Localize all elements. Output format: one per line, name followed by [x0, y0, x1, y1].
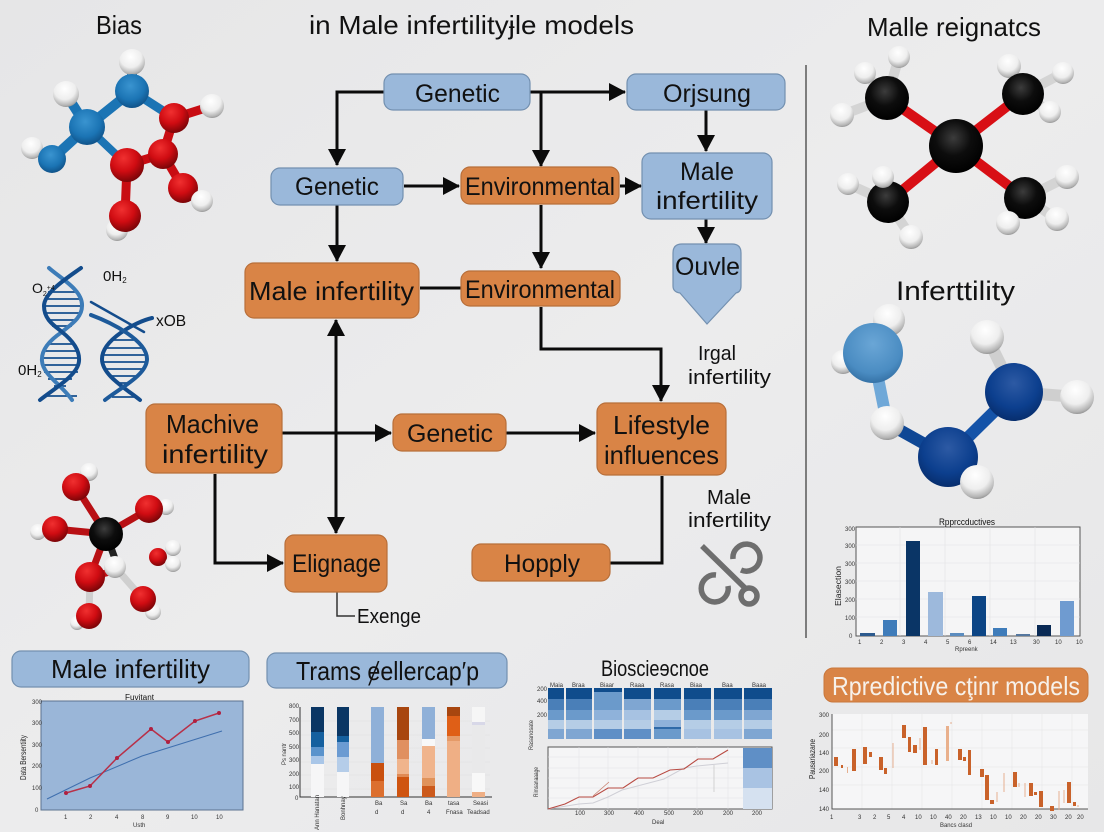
icon: scissors-like link — [701, 544, 760, 604]
chart: Reproductives bar chart: Elasection — [834, 566, 843, 606]
chart: line chart: 2 — [89, 815, 93, 821]
chart: candlestick: 4 — [902, 815, 906, 821]
icon: molecule bottom left — [30, 463, 181, 630]
chart: bioscience line chart: 200 — [723, 811, 734, 817]
node: Genetic left: Genetic — [295, 173, 379, 201]
chart: candlestick: 300 — [819, 713, 830, 719]
chart: stacked bars: Ba — [375, 801, 383, 807]
chart: Reproductives bar chart — [834, 517, 1083, 653]
chart: bioscience line chart — [534, 747, 772, 826]
node: Elignage: Elignage — [292, 550, 381, 578]
node: Ouvle callout — [673, 244, 741, 324]
chart: stacked bars: 800 — [289, 704, 300, 710]
node: Orjsung — [627, 74, 785, 110]
node: Lifestyle influences: influences — [604, 440, 719, 470]
banner: Male infertility: Male infertility — [51, 654, 210, 684]
banner: Male infertility — [12, 651, 249, 687]
chart: stacked bars: d — [375, 810, 378, 816]
chart: stacked bars: d — [401, 810, 404, 816]
node: Orjsung: Orjsung — [663, 80, 751, 108]
chart: Reproductives bar chart: 3 — [902, 640, 906, 646]
divider — [805, 65, 807, 638]
chart: Reproductives bar chart: 100 — [845, 616, 856, 622]
chart: candlestick: 10 — [915, 815, 922, 821]
chart: heatmap: Baa — [722, 683, 733, 689]
chart: heatmap: Maia — [550, 683, 564, 689]
label: Irgal infertility — [688, 343, 771, 389]
chart: stacked bars: Teadsad — [467, 810, 490, 816]
label: Irgal infertility: Irgal — [698, 343, 736, 365]
node: Environmental lower: Environmental — [465, 276, 615, 304]
label: Irgal infertility: infertility — [688, 367, 771, 389]
node: Genetic top — [384, 74, 530, 110]
label: O2: 2 — [43, 291, 47, 298]
chart: stacked bars: Ann Hanatan — [315, 795, 321, 830]
chart: line chart: 100 — [32, 786, 43, 792]
chart: candlestick: 140 — [819, 788, 830, 794]
chart: bioscience line chart: 300 — [604, 811, 615, 817]
chart: stacked bars: Fnasa — [446, 810, 463, 816]
chart: heatmap: Biaa — [690, 683, 703, 689]
chart: stacked bars: Seasi — [473, 801, 488, 807]
chart: Reproductives bar chart: 300 — [845, 562, 856, 568]
icon: molecule lower right — [831, 304, 1094, 499]
chart: bioscience line chart: 100 — [575, 811, 586, 817]
chart: heatmap: Raaa — [630, 683, 645, 689]
node: Machive infertility: infertility — [162, 439, 268, 469]
chart: candlestick: 20 — [960, 815, 967, 821]
chart: stacked bars: Sa — [400, 801, 408, 807]
label: O2: O — [32, 280, 43, 296]
chart: line chart: 10 — [216, 815, 223, 821]
flowchart connectors — [215, 92, 706, 616]
chart: line chart: 9 — [166, 815, 170, 821]
chart: line chart: Usth — [133, 823, 145, 829]
chart: Reproductives bar chart: 300 — [845, 527, 856, 533]
chart: candlestick: 13 — [975, 815, 982, 821]
chart: candlestick: 5 — [887, 815, 891, 821]
title: main heading: in Male infertility⁠ɉle models — [309, 10, 634, 40]
chart: bioscience line chart: 200 — [693, 811, 704, 817]
node: Hopply — [472, 544, 610, 581]
label: xOB: xOB — [156, 313, 186, 330]
node: Male infertility blue: Male — [680, 158, 734, 186]
chart: heatmap: Baaa — [752, 683, 767, 689]
chart: candlestick: 20 — [1035, 815, 1042, 821]
chart: candlestick: 200 — [819, 733, 830, 739]
chart: Reproductives bar chart: 300 — [845, 544, 856, 550]
label: Exenge: Exenge — [357, 606, 421, 628]
chart: candlestick: 1 — [830, 815, 834, 821]
chart: candlestick: 2 — [873, 815, 877, 821]
chart: Reproductives bar chart: Rpprccductives — [939, 517, 995, 527]
chart: stacked bars: 0 — [295, 796, 299, 802]
chart: Reproductives bar chart: 2 — [880, 640, 884, 646]
chart: candlestick: Bancs clasd — [940, 823, 972, 829]
chart: bioscience line chart: Deal — [652, 820, 664, 826]
chart: Reproductives bar chart: Rpreenk — [955, 647, 979, 653]
label: OH2 left: 2 — [37, 370, 42, 379]
chart: candlestick: 20 — [1065, 815, 1072, 821]
chart: line chart: 8 — [141, 815, 145, 821]
chart: line chart: 300 — [32, 743, 43, 749]
chart: stacked bars: 300 — [289, 758, 300, 764]
chart: line chart: 0 — [35, 808, 39, 814]
chart: Reproductives bar chart: 0 — [849, 634, 853, 640]
chart: candlestick — [808, 713, 1088, 829]
chart: line chart: 10 — [191, 815, 198, 821]
node: Hopply: Hopply — [504, 550, 580, 578]
chart: stacked bars: 100 — [289, 785, 300, 791]
chart: stacked bars: tasa — [448, 801, 460, 807]
label: O2: +4 — [47, 285, 55, 292]
chart: stacked bars: 700 — [289, 718, 300, 724]
chart: stacked bars: Ba — [425, 801, 433, 807]
chart: line chart: Data Bersentiity — [19, 735, 28, 780]
chart: stacked bars — [282, 704, 492, 830]
chart: Reproductives bar chart: 10 — [1055, 640, 1062, 646]
chart: heatmap: 200 — [537, 713, 548, 719]
chart: candlestick: 10 — [930, 815, 937, 821]
chart: stacked bars: Bonhnay — [341, 796, 347, 820]
chart: candlestick: 10 — [990, 815, 997, 821]
label: OH2 top: 2 — [122, 276, 127, 285]
chart: line chart: 300 — [32, 700, 43, 706]
chart: line chart: Fuvitant — [125, 693, 155, 702]
chart: candlestick: Pausariazane — [808, 739, 817, 779]
chart: bioscience line chart: 200 — [752, 811, 763, 817]
node: Male infertility orange: Male infertility — [249, 276, 414, 306]
banner: Rpredictive models: Rpredictive cţinr models — [832, 671, 1080, 701]
chart: heatmap — [529, 683, 772, 750]
node: Machive infertility: Machive — [166, 409, 259, 439]
node: Male infertility blue — [642, 153, 772, 219]
node: Genetic left — [271, 168, 403, 205]
label: OH2 left: 0H — [18, 362, 37, 379]
chart: line chart: 200 — [32, 764, 43, 770]
label: Male infertility: Male — [707, 487, 751, 509]
node: Environmental upper: Environmental — [465, 173, 615, 201]
chart: heatmap: 200 — [537, 687, 548, 693]
chart: line chart: 1 — [64, 815, 68, 821]
chart: bioscience line chart: 500 — [664, 811, 675, 817]
chart: heatmap: Biaar — [600, 683, 614, 689]
icon: DNA double helices — [40, 268, 152, 400]
chart: heatmap: 400 — [537, 699, 548, 705]
label: Male infertility — [688, 487, 771, 532]
node: Machive infertility — [146, 404, 282, 473]
chart: Reproductives bar chart: 30 — [1033, 640, 1040, 646]
chart: candlestick: 20 — [1020, 815, 1027, 821]
heading: Infertility: Inferttility — [896, 276, 1016, 306]
chart: Reproductives bar chart: 6 — [968, 640, 972, 646]
node: Genetic middle — [393, 414, 506, 451]
chart: Reproductives bar chart: 200 — [845, 598, 856, 604]
icon: molecule top right — [830, 46, 1079, 249]
chart: Reproductives bar chart: 1 — [858, 640, 862, 646]
label: OH2 top: 0H — [103, 268, 122, 285]
chart: bioscience line chart: Rimsanaaage — [534, 766, 540, 797]
chart: candlestick: 20 — [1077, 815, 1084, 821]
label: Male infertility: infertility — [688, 510, 771, 532]
chart: line chart: 4 — [115, 815, 119, 821]
heading: Bioscience: Bioscieɘcnoe — [601, 656, 709, 681]
chart: candlestick: 40 — [945, 815, 952, 821]
chart: heatmap: Braa — [572, 683, 585, 689]
chart: heatmap: Rasa — [660, 683, 675, 689]
chart: stacked bars: 4 — [427, 810, 431, 816]
chart: candlestick: 30 — [1050, 815, 1057, 821]
chart: heatmap: Rasanosate — [529, 719, 535, 750]
title: Bias: Bias — [96, 10, 142, 40]
chart: candlestick: 10 — [1005, 815, 1012, 821]
chart: Reproductives bar chart: 13 — [1010, 640, 1017, 646]
node: Lifestyle influences: Lifestyle — [613, 410, 710, 440]
chart: candlestick: 140 — [819, 751, 830, 757]
chart: Reproductives bar chart: 10 — [1076, 640, 1083, 646]
title: right heading: Malle reignatcs — [867, 12, 1041, 42]
chart: candlestick: 200 — [819, 769, 830, 775]
node: Ouvle callout: Ouvle — [675, 253, 740, 281]
node: Lifestyle influences — [597, 403, 726, 475]
chart: bioscience line chart: 400 — [634, 811, 645, 817]
chart: Reproductives bar chart: 4 — [924, 640, 928, 646]
chart: line chart — [19, 693, 243, 829]
icon: molecule top left — [21, 49, 224, 241]
chart: Reproductives bar chart: 300 — [845, 580, 856, 586]
banner: Trams ellercap: Trams ɇellercap′p — [296, 656, 479, 686]
node: Elignage — [285, 535, 387, 592]
chart: stacked bars: 200 — [289, 772, 300, 778]
node: Genetic top: Genetic — [415, 80, 500, 108]
chart: candlestick: 3 — [858, 815, 862, 821]
chart: Reproductives bar chart: 5 — [946, 640, 950, 646]
chart: stacked bars: Ps nantr — [282, 743, 288, 765]
chart: stacked bars: 500 — [289, 745, 300, 751]
chart: candlestick: 140 — [819, 807, 830, 813]
chart: line chart: 300 — [32, 721, 43, 727]
node: Genetic middle: Genetic — [407, 420, 493, 448]
chart: stacked bars: 500 — [289, 731, 300, 737]
node: Male infertility blue: infertility — [656, 187, 759, 215]
node: Male infertility orange — [245, 263, 419, 318]
chart: Reproductives bar chart: 14 — [990, 640, 997, 646]
